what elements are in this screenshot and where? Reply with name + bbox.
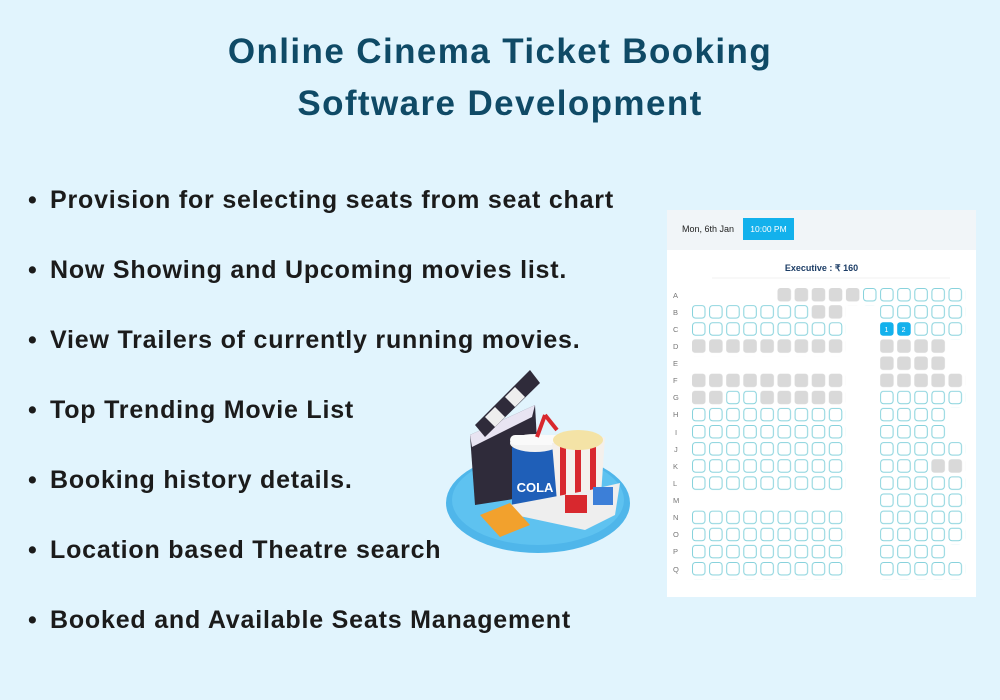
seat grid: K <box>673 462 678 471</box>
bullet 4: • <box>28 396 38 424</box>
header bar <box>667 210 976 250</box>
date: Mon, 6th Jan <box>682 224 734 234</box>
seat grid: I <box>675 428 677 437</box>
bullet 2: • <box>28 256 38 284</box>
bullet 6: Location based Theatre search <box>50 536 441 564</box>
seat grid: Q <box>673 565 679 574</box>
bullet 5: • <box>28 466 38 494</box>
seat grid: J <box>674 445 678 454</box>
title: Software Development <box>297 84 703 123</box>
seat grid: 1 <box>884 327 888 334</box>
bullet 1: • <box>28 186 38 214</box>
seat grid: D <box>673 342 679 351</box>
bullet 2: Now Showing and Upcoming movies list. <box>50 256 567 284</box>
seat grid: C <box>673 325 679 334</box>
bullet 3: • <box>28 326 38 354</box>
illustration: cinema clapperboard, cola, popcorn, glasses: COLA <box>517 480 554 495</box>
seat grid: 2 <box>902 327 906 334</box>
seat chart panel <box>667 210 976 597</box>
seat grid: N <box>673 513 678 522</box>
seat grid: G <box>673 393 679 402</box>
seat grid: E <box>673 359 678 368</box>
bullet 7: Booked and Available Seats Management <box>50 606 571 634</box>
bullet 6: • <box>28 536 38 564</box>
time button <box>743 218 794 240</box>
bullet 4: Top Trending Movie List <box>50 396 354 424</box>
price label: Executive : ₹ 160 <box>785 263 858 273</box>
seat grid: B <box>673 308 678 317</box>
bullet 3: View Trailers of currently running movies. <box>50 326 581 354</box>
time button: 10:00 PM <box>750 224 787 234</box>
bullet 1: Provision for selecting seats from seat chart <box>50 186 614 214</box>
seat grid: L <box>673 479 677 488</box>
seat grid: P <box>673 547 678 556</box>
seat grid <box>673 278 966 580</box>
seat grid: H <box>673 410 678 419</box>
title: Online Cinema Ticket Booking <box>228 32 772 71</box>
seat grid: F <box>673 376 678 385</box>
seat grid: O <box>673 530 679 539</box>
title <box>228 32 772 123</box>
seat grid: A <box>673 291 678 300</box>
illustration: cinema clapperboard, cola, popcorn, glasses <box>446 370 630 553</box>
bullet 7: • <box>28 606 38 634</box>
feature list <box>28 186 614 634</box>
seat grid: M <box>673 496 679 505</box>
bullet 5: Booking history details. <box>50 466 353 494</box>
